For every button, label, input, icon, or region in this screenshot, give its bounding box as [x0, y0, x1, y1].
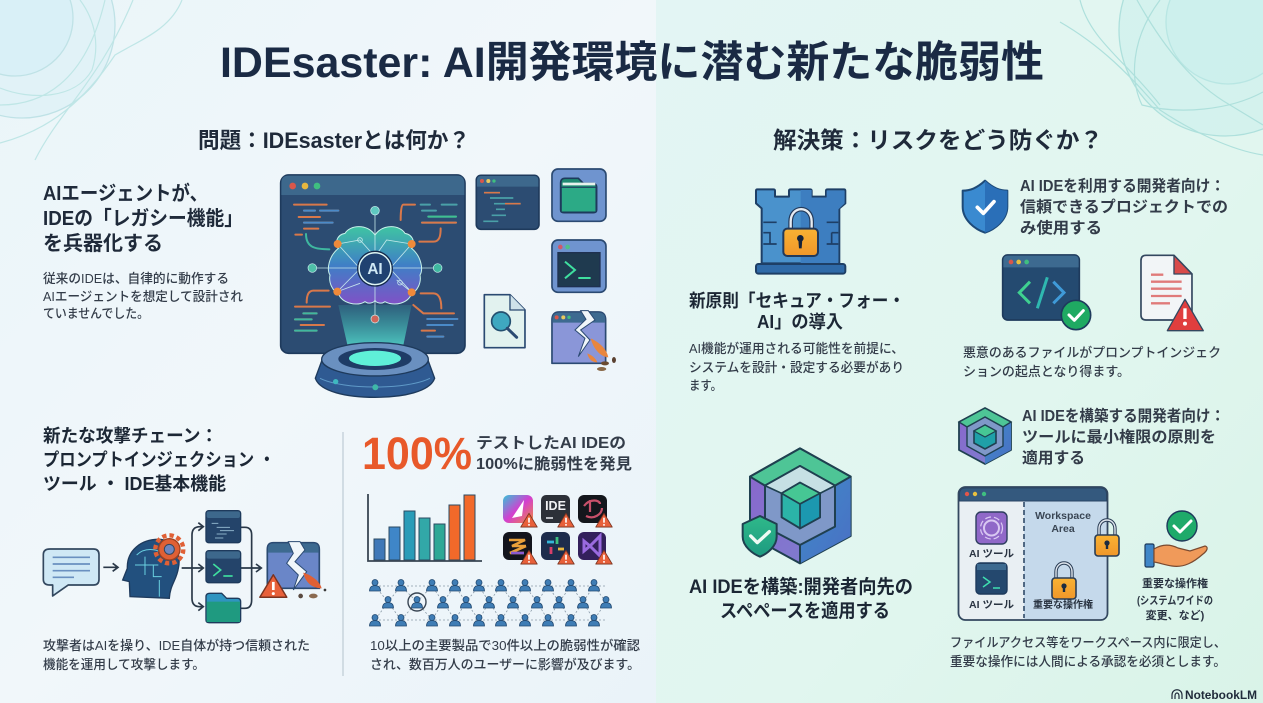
- text block: build AI IDE: スペペースを適用する: [720, 600, 890, 622]
- text block: malicious file: [963, 345, 1221, 379]
- illustration: AI brain in IDE: AI: [367, 261, 383, 278]
- icon: layered cube with shield: [743, 448, 851, 563]
- heading: developers building: AI IDEを構築する開発者向け：: [1022, 406, 1225, 425]
- text block: attack description: [43, 638, 310, 672]
- heading: developers using: 信頼できるプロジェクトでの: [1020, 198, 1228, 216]
- label: important operations: [1137, 576, 1213, 622]
- text block: AI agents weaponize IDE: IDEの「レガシー機能」: [43, 207, 243, 230]
- title: IDEsaster: AI開発環境に潜む新たな脆弱性: [220, 39, 1044, 87]
- text block: secure for AI: [689, 291, 905, 393]
- text block: AI agents weaponize IDE: を兵器化する: [43, 232, 163, 255]
- text block: malicious file: 悪意のあるファイルがプロンプトインジェク: [963, 345, 1221, 360]
- icon: hand with check: [1145, 511, 1207, 567]
- brain: [328, 227, 422, 304]
- heading: developers building: 適用する: [1022, 448, 1085, 467]
- icon: prompt speech bubble: [43, 549, 99, 596]
- text block: workspace restriction: [950, 635, 1226, 669]
- diagram: workspace window: [958, 487, 1119, 620]
- heading: solution: 解決策：リスクをどう防ぐか？: [773, 127, 1103, 153]
- heading: attack chain: 新たな攻撃チェーン：: [43, 425, 218, 446]
- text block: secure for AI: AI機能が運用される可能性を前提に、: [689, 341, 904, 356]
- text block: AI agents weaponize IDE: AIエージェントを想定して設計され: [43, 289, 243, 304]
- text block: attack description: 機能を運用して攻撃します。: [43, 657, 205, 672]
- heading: developers building: [1022, 406, 1225, 467]
- icons: code, folder, terminal, document, broken window: [476, 169, 616, 371]
- icon: document search: [484, 295, 525, 348]
- panel: using AI IDE: [963, 177, 1228, 379]
- icon: broken window with warning: [260, 542, 326, 598]
- arrows: branching: [182, 523, 261, 611]
- background right: [656, 0, 1263, 703]
- background left: [0, 0, 656, 703]
- icon: folder card: [552, 169, 606, 221]
- text block: secure for AI: ます。: [689, 378, 722, 393]
- user network: [370, 580, 612, 626]
- diagram: workspace window: AI ツール: [969, 548, 1014, 560]
- logo: NotebookLM: NotebookLM: [1185, 690, 1257, 702]
- heading: developers using: [1020, 177, 1228, 237]
- icon: folder: [206, 593, 241, 623]
- text block: attack description: 攻撃者はAIを操り、IDE自体が持つ信頼された: [43, 638, 310, 653]
- stat: 100%: 100%: [362, 428, 472, 479]
- heading: problem: 問題：IDEsasterとは何か？: [198, 128, 470, 153]
- icon: castle with lock: [756, 189, 845, 274]
- text block: malicious file: ションの起点となり得ます。: [963, 364, 1130, 379]
- stat caption: テストしたAI IDEの: [476, 434, 626, 452]
- diagram: workspace window: 重要な操作権: [1033, 598, 1093, 611]
- heading: developers using: み使用する: [1020, 219, 1102, 237]
- icon: terminal tool: [976, 563, 1007, 594]
- panel: solution: [689, 127, 1228, 669]
- text block: workspace restriction: 重要な操作には人間による承認を必須とします。: [950, 654, 1226, 669]
- icon: malicious document: [1141, 255, 1203, 331]
- icon: lock inner: [1052, 563, 1076, 599]
- product icons with warnings: [503, 495, 612, 564]
- hologram beam: [338, 305, 412, 353]
- text block: build AI IDE: AI IDEを構築:開発者向先の: [689, 575, 913, 598]
- icon: code window: [206, 511, 241, 543]
- diagram: workspace window: AI ツール: [969, 599, 1014, 611]
- heading: attack chain: プロンプトインジェクション ・: [43, 450, 275, 470]
- text block: AI agents weaponize IDE: 従来のIDEは、自律的に動作する: [43, 271, 229, 286]
- icon: terminal window: [206, 551, 241, 583]
- icon: small layered cube: [959, 408, 1011, 464]
- heading: developers building: ツールに最小権限の原則を: [1022, 427, 1216, 446]
- icon: shield check: [963, 181, 1007, 233]
- icon: trusted code window: [1003, 255, 1091, 330]
- text block: workspace restriction: ファイルアクセス等をワークスペース内に限定し、: [950, 635, 1226, 650]
- heading: attack chain: ツール ・ IDE基本機能: [43, 474, 226, 494]
- stat caption: 100%に脆弱性を発見: [476, 454, 633, 473]
- label: important operations: (システムワイドの: [1137, 594, 1213, 607]
- product icons with warnings: IDE: [545, 499, 566, 513]
- panel: attack chain: [43, 425, 326, 672]
- text block: secure for AI: AI」の導入: [757, 312, 843, 332]
- illustration: AI brain in IDE: [281, 175, 465, 397]
- text block: build AI IDE: [689, 575, 913, 622]
- bar chart: [368, 494, 482, 561]
- panel: 100 percent stat: [362, 428, 640, 672]
- panel: building AI IDE: [950, 406, 1226, 669]
- icon: AI tool: [976, 512, 1007, 544]
- label: important operations: 重要な操作権: [1142, 576, 1208, 590]
- text block: impact: 10以上の主要製品で30件以上の脆弱性が確認: [370, 638, 640, 653]
- text block: AI agents weaponize IDE: [43, 181, 243, 321]
- icon: code window: [476, 175, 539, 229]
- text block: impact: され、数百万人のユーザーに影響が及びます。: [370, 657, 640, 672]
- text block: secure for AI: システムを設計・設定する必要があり: [689, 360, 904, 375]
- icon: AI head with gear: [123, 535, 183, 598]
- text block: secure for AI: 新原則「セキュア・フォー・: [689, 291, 905, 311]
- decorative corner circles: [0, 0, 1263, 160]
- icon: terminal card: [552, 240, 606, 292]
- panel: problem: [43, 128, 616, 397]
- diagram: attack flow: [43, 511, 326, 623]
- text block: impact: [370, 638, 640, 672]
- diagram: workspace window: Area: [1051, 523, 1075, 535]
- heading: developers using: AI IDEを利用する開発者向け：: [1020, 177, 1225, 195]
- icon: broken window: [552, 311, 616, 371]
- label: important operations: 変更、など): [1146, 608, 1205, 622]
- text block: AI agents weaponize IDE: AIエージェントが、: [43, 181, 208, 205]
- text block: AI agents weaponize IDE: ていませんでした。: [43, 306, 149, 321]
- stat caption: [476, 434, 633, 473]
- icon: lock outer: [1095, 520, 1119, 556]
- diagram: workspace window: Workspace: [1035, 510, 1091, 522]
- heading: attack chain: [43, 425, 275, 494]
- pedestal: [315, 343, 435, 397]
